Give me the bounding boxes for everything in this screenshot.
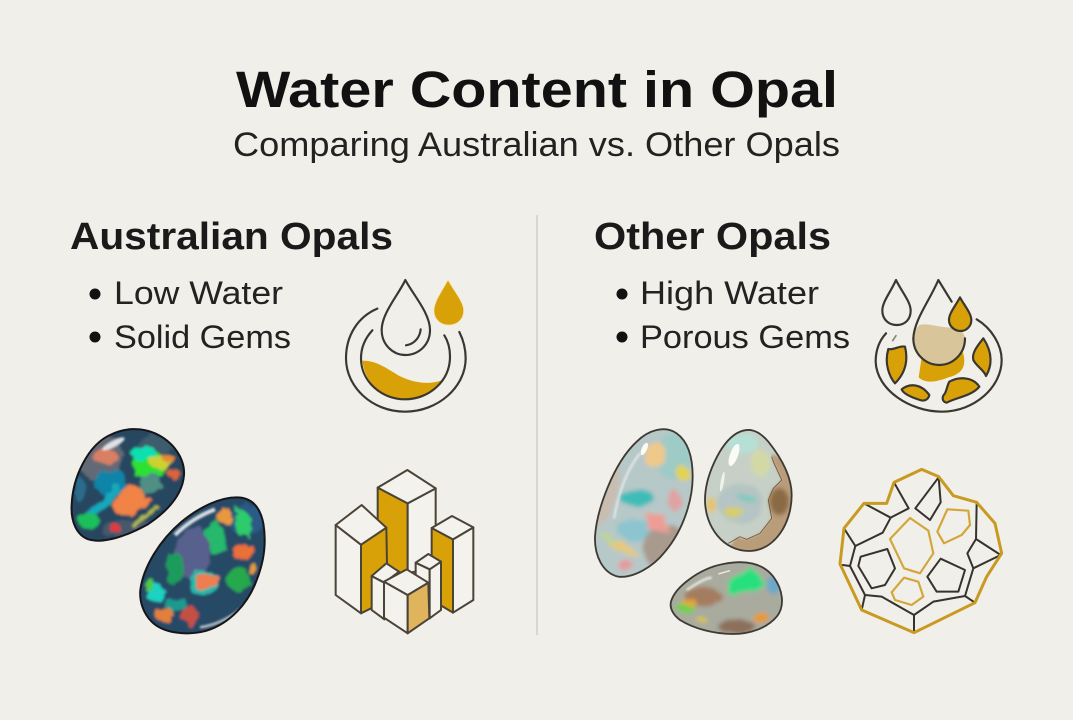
- list: other traits: High Water: [640, 275, 819, 311]
- list: Australian traits: Solid Gems: [114, 319, 291, 355]
- opal: Australian dark gem two: [139, 496, 266, 634]
- icon: high water drops: [876, 280, 1002, 412]
- opal: pale gem with brown matrix: [704, 429, 793, 552]
- center divider: [536, 215, 538, 635]
- title: Water Content in Opal: [236, 61, 838, 118]
- list: other traits: Porous Gems: [640, 319, 850, 355]
- opal: pale gem large: [594, 428, 694, 578]
- opal: Australian dark gem one: [70, 428, 186, 542]
- list: Australian traits: [90, 275, 291, 355]
- opal: pale gem small: [670, 561, 783, 635]
- icon: low water drops: [346, 280, 466, 412]
- panel: Australian Opals: [53, 216, 473, 647]
- subtitle: Comparing Australian vs. Other Opals: [233, 126, 840, 164]
- list: Australian traits: Low Water: [114, 275, 283, 311]
- icon: porous cell structure: [840, 469, 1002, 633]
- panel: Other Opals: [580, 216, 1002, 643]
- icon: solid crystal blocks: [336, 470, 473, 633]
- heading: Australian Opals: Australian Opals: [70, 216, 393, 258]
- heading: Other Opals: Other Opals: [594, 216, 831, 258]
- list: other traits: [616, 275, 850, 355]
